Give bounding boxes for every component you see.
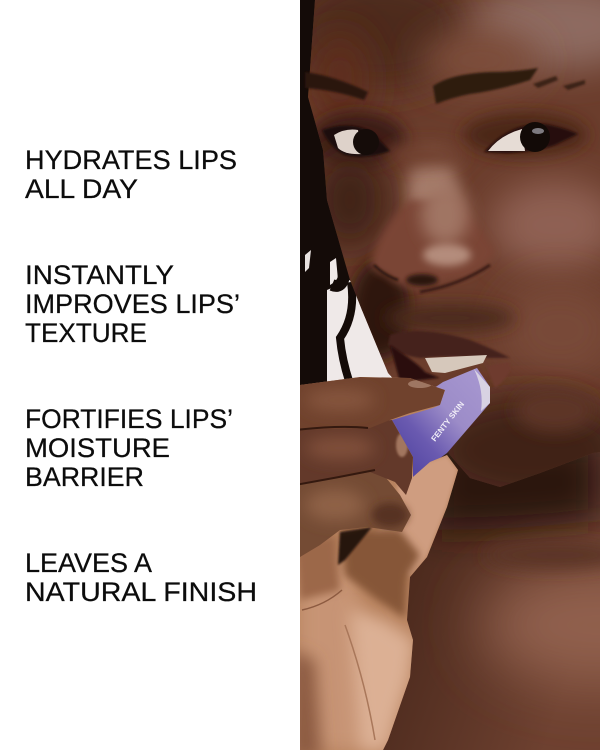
lip balm tube bbox=[390, 368, 490, 480]
thumb bbox=[370, 455, 458, 577]
middle finger bbox=[295, 420, 413, 495]
photo: man applying lip balm bbox=[290, 0, 600, 750]
text: fortifies lips' moisture barrier bbox=[25, 404, 233, 492]
hand and fingers bbox=[300, 377, 458, 750]
neck and chest bbox=[380, 440, 600, 750]
mustache shadow bbox=[385, 304, 515, 332]
text: instantly improves lips' texture: INSTANTLY bbox=[25, 260, 174, 290]
panel: benefits text bbox=[25, 145, 257, 607]
text: instantly improves lips' texture: TEXTURE bbox=[25, 318, 147, 348]
text: leaves a natural finish bbox=[25, 548, 257, 607]
palm web bbox=[342, 530, 420, 618]
text: instantly improves lips' texture: IMPROVES LIPS’ bbox=[25, 289, 240, 319]
text: fortifies lips' moisture barrier: BARRIER bbox=[25, 462, 144, 492]
ring finger bbox=[300, 472, 411, 557]
tube label: FENTY SKIN bbox=[429, 398, 467, 443]
text: fortifies lips' moisture barrier: MOISTURE bbox=[25, 433, 170, 463]
text: fortifies lips' moisture barrier: FORTIFIES LIPS’ bbox=[25, 404, 233, 434]
text: hydrates lips all day bbox=[25, 145, 237, 204]
lips and mouth bbox=[388, 331, 510, 388]
index finger bbox=[295, 377, 445, 430]
chin and beard bbox=[448, 378, 600, 487]
hair and backdrop bbox=[300, 0, 390, 400]
text: hydrates lips all day: ALL DAY bbox=[25, 174, 138, 204]
text: hydrates lips all day: HYDRATES LIPS bbox=[25, 145, 237, 175]
nose bbox=[372, 200, 495, 290]
palm light bbox=[300, 560, 395, 750]
eyes bbox=[322, 122, 578, 157]
eye sockets bbox=[310, 112, 406, 168]
forehead shading bbox=[290, 0, 470, 90]
gap between fingers and thumb bbox=[338, 527, 372, 565]
cheek shading bbox=[490, 180, 600, 270]
text: leaves a natural finish: NATURAL FINISH bbox=[25, 577, 257, 607]
eyebrows bbox=[305, 68, 585, 104]
face skin bbox=[290, 0, 600, 505]
text: instantly improves lips' texture bbox=[25, 260, 240, 348]
text: leaves a natural finish: LEAVES A bbox=[25, 548, 152, 578]
nose bridge highlight bbox=[398, 158, 464, 206]
